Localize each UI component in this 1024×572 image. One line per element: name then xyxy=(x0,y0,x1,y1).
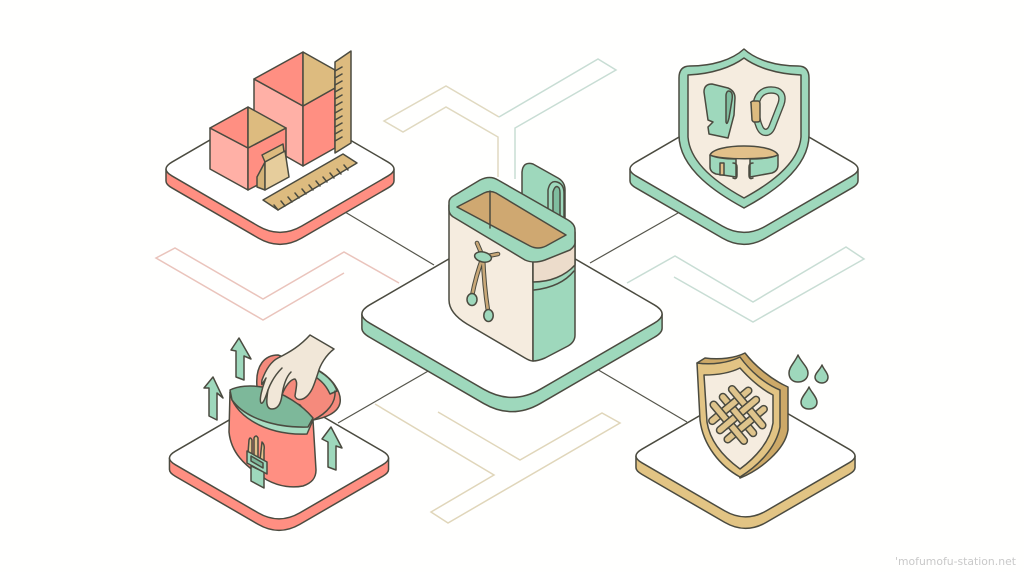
icon: drawstring xyxy=(467,243,498,322)
icon: collar xyxy=(710,146,778,179)
icon: pouch rim xyxy=(449,178,575,262)
background circuit: left xyxy=(156,248,399,320)
panel: durable fabric xyxy=(636,353,855,528)
icon: vertical ruler xyxy=(335,51,351,153)
icon: flat ruler xyxy=(263,154,357,210)
icon: tall box xyxy=(254,52,335,166)
panel: secure attachment xyxy=(630,49,858,244)
icon: open flap xyxy=(257,355,340,420)
platform: green xyxy=(630,106,858,244)
background circuit: top xyxy=(384,59,616,179)
watermark: 'mofumofu-station.net xyxy=(895,555,1017,568)
platform: coral xyxy=(166,106,394,244)
panel: size and capacity xyxy=(166,51,394,244)
icon: carabiner xyxy=(751,90,782,132)
icon: small box xyxy=(210,107,286,190)
icon: up arrows xyxy=(204,338,342,470)
background circuit: right xyxy=(627,247,864,322)
panel: easy opening xyxy=(169,335,389,530)
icon: pouch xyxy=(229,386,316,487)
icon: green shield xyxy=(679,49,809,208)
background circuit: bottom xyxy=(375,404,620,523)
icon: hand xyxy=(260,335,334,409)
icon: paper bag xyxy=(257,144,289,190)
icon: pouch clip xyxy=(522,163,565,222)
panel: central pouch xyxy=(362,163,662,412)
platform: coral xyxy=(169,397,389,530)
icon: fabric weave xyxy=(700,377,776,453)
icon: woven shield xyxy=(697,353,788,478)
connector lines xyxy=(338,212,687,423)
platform: large green xyxy=(362,231,662,412)
icon: belt clip xyxy=(704,84,735,138)
platform: gold xyxy=(636,395,855,528)
icon: buckle xyxy=(247,436,267,488)
icon: pouch body xyxy=(449,205,575,361)
icon: water drops xyxy=(789,355,828,409)
